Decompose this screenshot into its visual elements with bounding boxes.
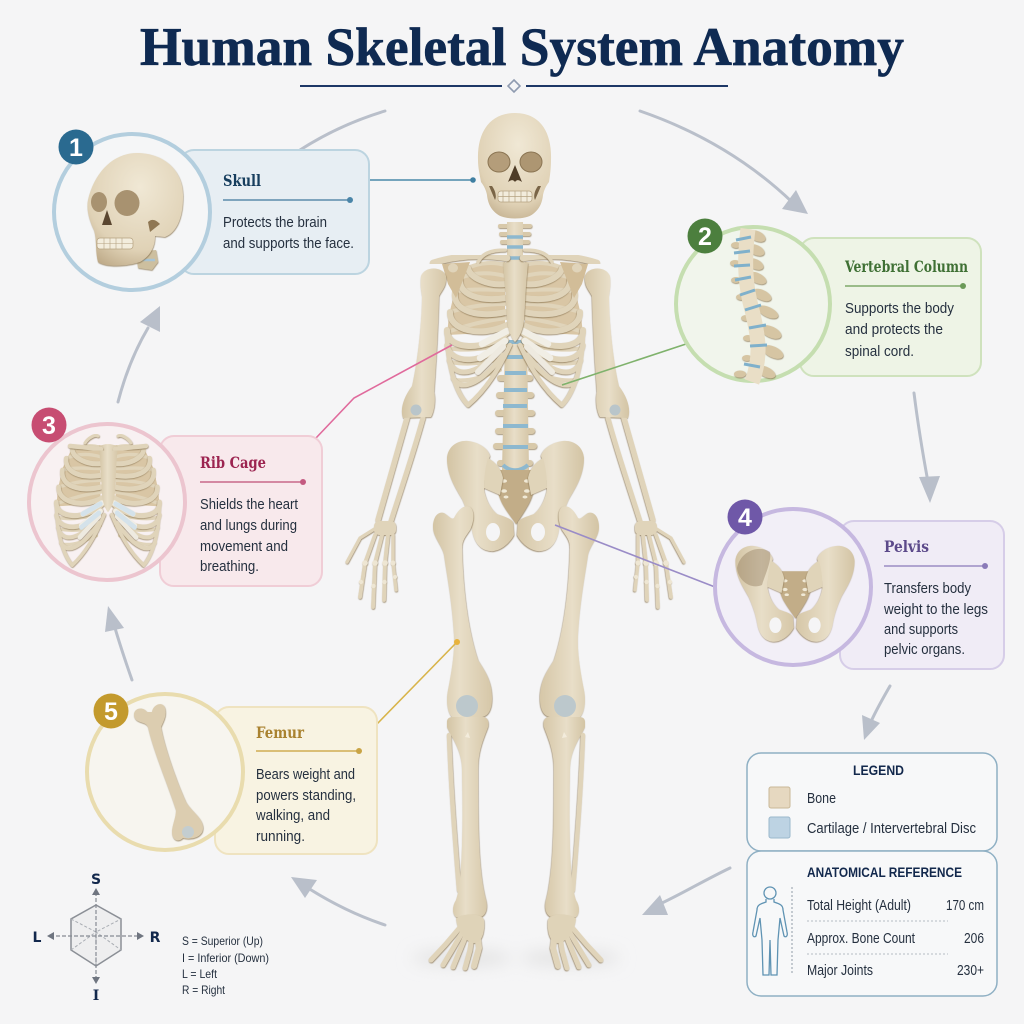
axis labels: I <box>93 988 99 1004</box>
rib text: breathing. <box>200 559 259 575</box>
row: major joints: Major Joints <box>807 963 873 979</box>
compass key: R = Right <box>182 983 226 997</box>
heading: rib cage: Rib Cage <box>200 453 266 472</box>
pelvis text: and supports <box>884 622 958 638</box>
femur text: running. <box>256 829 305 845</box>
arms <box>378 268 653 521</box>
legend panel <box>747 753 997 851</box>
vertebral text: and protects the <box>845 322 943 338</box>
pelvis info card <box>840 521 1004 669</box>
title: Human Skeletal System Anatomy <box>140 17 904 77</box>
legend swatch: cartilage: Cartilage / Intervertebral Disc <box>807 821 976 837</box>
pelvis text <box>883 581 988 658</box>
legend swatch: bone: Bone <box>807 791 836 807</box>
icon: vertebral column <box>730 228 785 382</box>
heading: vertebral column: Vertebral Column <box>844 257 968 276</box>
axis labels: L <box>33 930 42 946</box>
anatomical reference panel <box>747 851 997 996</box>
panel: vertebral column <box>676 218 981 382</box>
rib text: Shields the heart <box>200 497 298 513</box>
vertebral info card <box>800 238 981 376</box>
rib circle <box>29 424 185 580</box>
row: major joints <box>807 963 984 979</box>
heading: skull: Skull <box>223 171 261 190</box>
heading: pelvis: Pelvis <box>884 537 929 556</box>
rib cage <box>447 261 583 405</box>
skull text: and supports the face. <box>223 236 354 252</box>
pelvis text: Transfers body <box>884 581 972 597</box>
badge 1 <box>58 130 94 164</box>
hands <box>347 521 684 607</box>
skull info card <box>180 150 369 274</box>
badge 3 <box>32 408 66 442</box>
compass key: L = Left <box>182 967 218 981</box>
compass key: I = Inferior (Down) <box>182 951 269 965</box>
rib text: and lungs during <box>200 518 297 534</box>
spine <box>493 222 537 470</box>
heading rule <box>884 563 988 569</box>
skull <box>478 113 551 218</box>
icon: human outline <box>753 887 792 975</box>
legend swatch: bone <box>769 787 836 808</box>
central skeleton figure <box>347 113 684 968</box>
vertebral text: Supports the body <box>845 301 955 317</box>
heading rule <box>223 197 353 203</box>
heading rule <box>845 283 966 289</box>
orientation compass <box>33 872 161 1004</box>
badge 2: 2 <box>698 223 712 251</box>
femur info card <box>215 707 377 854</box>
skull circle <box>54 134 210 290</box>
pelvis text: weight to the legs <box>883 602 988 618</box>
vertebral text: spinal cord. <box>845 344 914 360</box>
panel: pelvis <box>715 500 1004 669</box>
badge 4 <box>728 500 762 534</box>
rib text: movement and <box>200 539 288 555</box>
heading rule <box>256 748 362 754</box>
heading rule <box>200 479 306 485</box>
femur text: powers standing, <box>256 788 356 804</box>
pelvis <box>447 441 584 551</box>
row: bone count: Approx. Bone Count <box>807 931 915 947</box>
badge 1: 1 <box>69 134 83 162</box>
icon: femur bone <box>134 704 203 840</box>
clavicles <box>433 250 597 298</box>
rib info card <box>160 436 322 586</box>
badge 4: 4 <box>738 504 752 532</box>
leader lines <box>316 177 715 724</box>
foot shadows <box>412 950 620 966</box>
icon: skull side view <box>87 153 183 270</box>
badge 2 <box>688 218 722 254</box>
axis labels: S <box>91 872 101 888</box>
panel: femur <box>87 694 377 854</box>
legend heading: LEGEND <box>853 762 904 778</box>
reference heading: ANATOMICAL REFERENCE <box>807 865 962 880</box>
badge 5 <box>94 694 128 728</box>
panel: rib cage <box>29 408 322 586</box>
title divider <box>300 80 728 92</box>
row: total height: Total Height (Adult) <box>807 898 911 914</box>
compass key <box>182 934 269 997</box>
rib text <box>200 497 298 575</box>
pelvis text: pelvic organs. <box>884 642 965 658</box>
femur text: walking, and <box>255 808 330 824</box>
skull text <box>223 215 354 252</box>
badge 5: 5 <box>104 698 118 726</box>
vertebral circle <box>676 227 830 381</box>
femur text: Bears weight and <box>256 767 355 783</box>
compass key: S = Superior (Up) <box>182 934 263 948</box>
feet <box>431 914 601 968</box>
legend swatch: cartilage <box>769 817 976 838</box>
vertebral text <box>845 301 955 360</box>
skull text: Protects the brain <box>223 215 327 231</box>
axis labels <box>33 872 161 1004</box>
pelvis circle <box>715 509 871 665</box>
femur text <box>255 767 356 845</box>
row: bone count: 206 <box>964 931 984 947</box>
legs <box>433 506 599 917</box>
icon: pelvis <box>735 546 855 642</box>
badge 3: 3 <box>42 412 56 440</box>
heading: femur: Femur <box>256 723 304 742</box>
row: major joints: 230+ <box>957 963 984 979</box>
axis labels: R <box>150 930 161 946</box>
femur circle <box>87 694 243 850</box>
row: total height: 170 cm <box>946 898 984 914</box>
icon: rib cage <box>56 435 160 565</box>
row: total height <box>807 898 984 914</box>
panel: skull <box>54 130 369 290</box>
cycle arrows <box>105 111 940 925</box>
